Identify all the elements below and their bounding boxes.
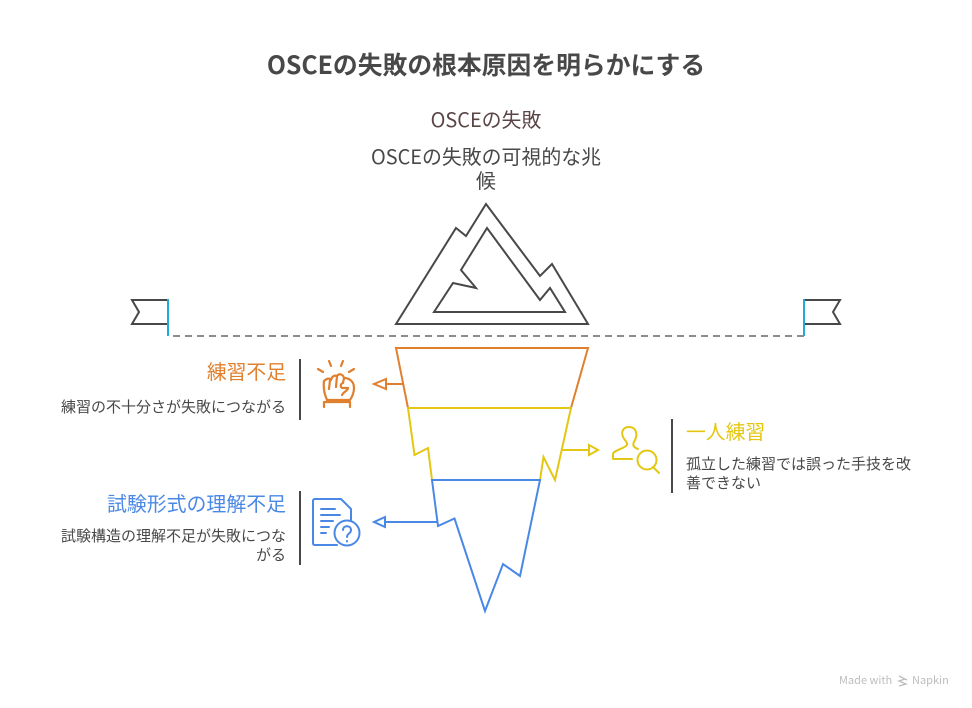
divider: exam format bbox=[299, 491, 301, 565]
icon: person with magnifier bbox=[613, 427, 659, 473]
arrow: to exam format bbox=[374, 517, 437, 527]
text: visible signs: 候 bbox=[476, 165, 496, 194]
icon: document with question mark bbox=[313, 499, 360, 546]
heading: solo practice: 一人練習 bbox=[686, 416, 765, 445]
text: visible signs: OSCEの失敗の可視的な兆 bbox=[371, 141, 601, 170]
heading: practice shortage: 練習不足 bbox=[207, 356, 286, 385]
text: solo practice description: 善できない bbox=[686, 472, 761, 492]
divider: solo practice bbox=[671, 419, 673, 493]
text: exam format description: 試験構造の理解不足が失敗につな bbox=[61, 525, 286, 546]
text: visible signs bbox=[371, 141, 601, 194]
text: exam format description bbox=[61, 525, 286, 564]
icon: right flag bbox=[804, 299, 840, 336]
iceberg layer: practice shortage bbox=[396, 348, 588, 408]
heading: OSCE failure: OSCEの失敗 bbox=[431, 104, 541, 133]
waterline bbox=[173, 335, 804, 337]
iceberg layer: solo practice bbox=[408, 408, 571, 480]
text: solo practice description: 孤立した練習では誤った手技を改 bbox=[686, 453, 911, 474]
arrow: to practice shortage bbox=[374, 379, 403, 389]
divider: practice shortage bbox=[299, 359, 301, 420]
text: practice shortage description: 練習の不十分さが失敗につながる bbox=[61, 396, 286, 417]
footer: Made with Napkin: Napkin bbox=[912, 672, 949, 688]
icon: iceberg tip bbox=[396, 204, 588, 324]
title: OSCEの失敗の根本原因を明らかにする bbox=[267, 46, 705, 82]
text: exam format description: がる bbox=[256, 544, 286, 564]
iceberg layer: exam format bbox=[432, 480, 540, 611]
icon: Napkin mark bbox=[899, 676, 907, 686]
arrow: to solo practice bbox=[562, 445, 598, 455]
icon: left flag bbox=[132, 299, 168, 336]
footer: Made with Napkin: Made with bbox=[839, 672, 892, 688]
footer: Made with Napkin bbox=[839, 672, 949, 688]
heading: exam format: 試験形式の理解不足 bbox=[107, 488, 286, 517]
icon: fist bbox=[318, 361, 354, 407]
text: solo practice description bbox=[686, 453, 911, 492]
